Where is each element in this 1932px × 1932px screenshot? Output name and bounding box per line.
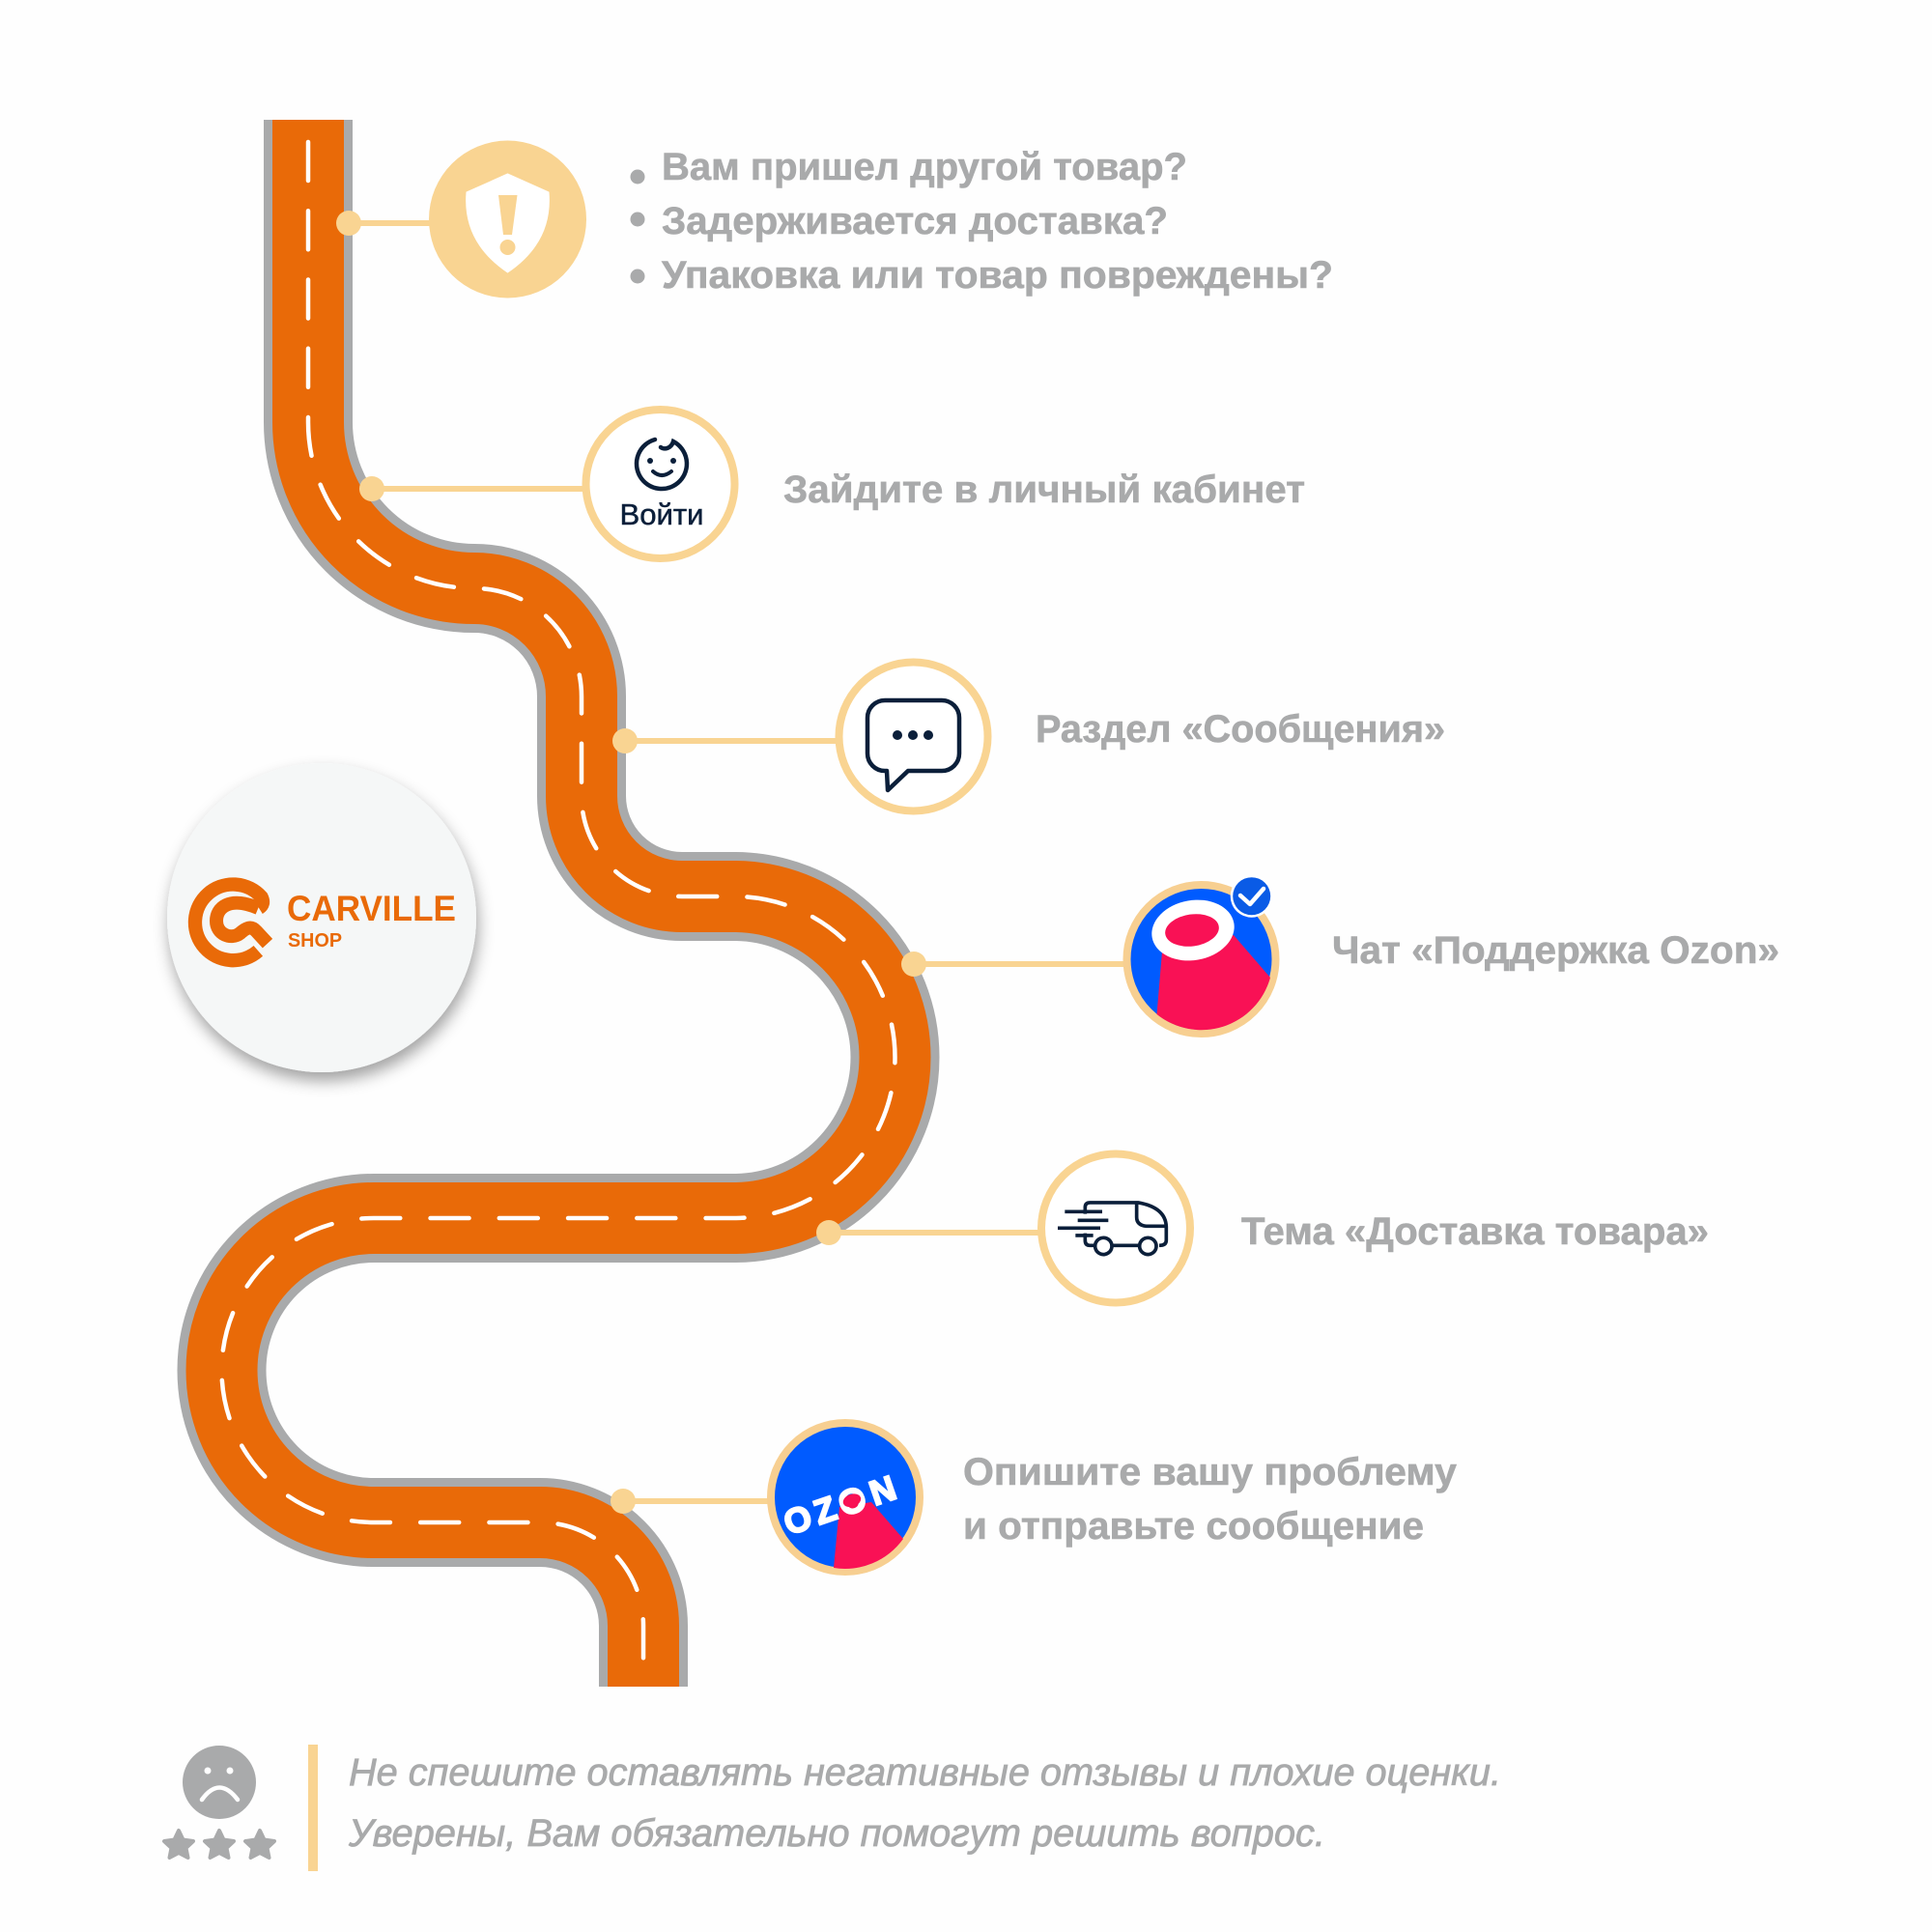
text: closing note — [348, 1751, 1501, 1855]
text: step 4: Чат «Поддержка Ozon» — [1332, 929, 1779, 972]
connector: step 5 — [816, 1220, 1041, 1245]
icon: sad face with three stars — [164, 1746, 274, 1858]
text: list of problems — [630, 146, 1333, 297]
text: step 6: и отправьте сообщение — [963, 1505, 1424, 1548]
text: closing note: Не спешите оставлять негативные отзывы и плохие оценки. — [349, 1751, 1501, 1794]
icon: warning shield — [429, 141, 586, 298]
text: step 2: Зайдите в личный кабинет — [783, 469, 1305, 511]
icon: login: Войти — [620, 497, 703, 531]
text: list of problems: Вам пришел другой товар? — [662, 146, 1187, 188]
icon: ozon logo — [771, 1423, 920, 1572]
text: step 3: Раздел «Сообщения» — [1036, 708, 1445, 751]
logo badge: Carville Shop: SHOP — [288, 930, 342, 952]
text: list of problems: Упаковка или товар повреждены? — [662, 254, 1333, 297]
connector: step 4 — [901, 952, 1131, 977]
icon: ozon support chat — [1126, 875, 1275, 1034]
winding road — [222, 120, 895, 1687]
connector: step 2 — [359, 476, 589, 501]
text: list of problems: Задерживается доставка? — [662, 200, 1168, 242]
connector: step 3 — [612, 728, 842, 753]
icon: delivery truck — [1041, 1153, 1190, 1302]
icon: ozon logo: OZON — [779, 1467, 901, 1543]
text: closing note: Уверены, Вам обязательно помогут решить вопрос. — [348, 1812, 1325, 1855]
text: step 6 — [963, 1451, 1458, 1548]
icon: messages — [838, 663, 987, 811]
icon: login — [585, 410, 734, 558]
text: step 5: Тема «Доставка товара» — [1241, 1210, 1709, 1253]
text: step 6: Опишите вашу проблему — [963, 1451, 1458, 1493]
connector: step 6 — [611, 1489, 773, 1514]
logo badge: Carville Shop — [167, 763, 476, 1072]
connector: step 1 — [336, 211, 436, 236]
logo badge: Carville Shop: CARVILLE — [287, 889, 456, 928]
divider bar — [308, 1745, 318, 1871]
